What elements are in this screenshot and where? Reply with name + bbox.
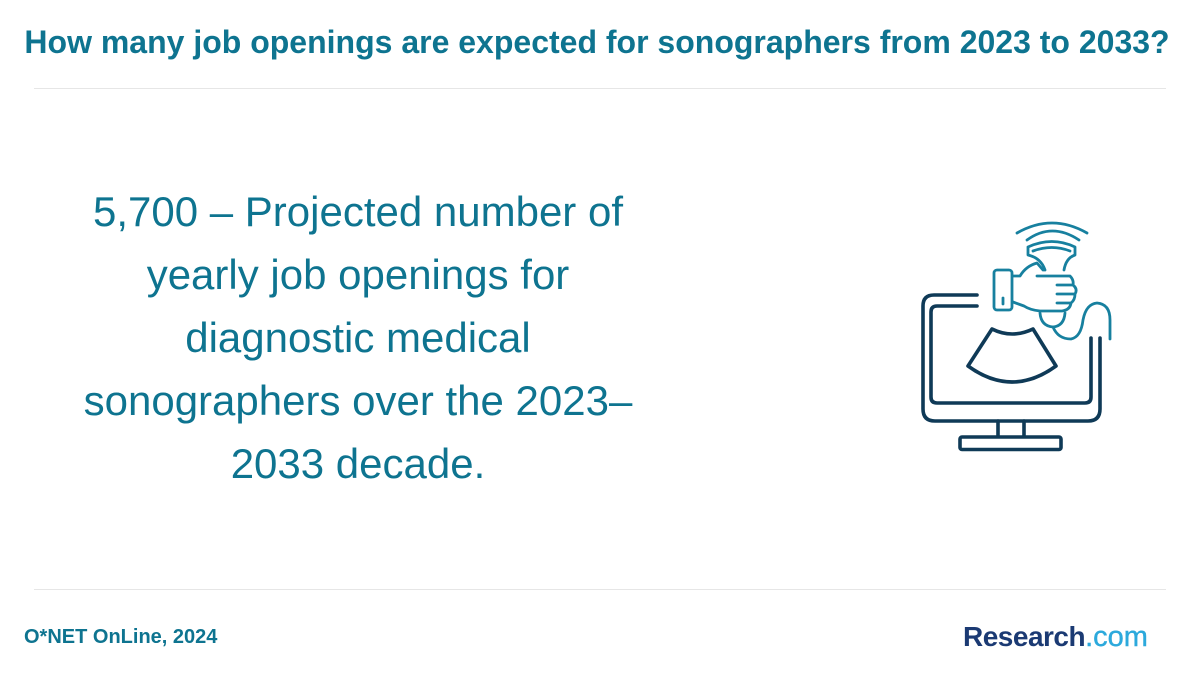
main statistic text: diagnostic medical — [185, 314, 531, 361]
icon part: monitor — [923, 295, 1100, 450]
main statistic text — [84, 188, 632, 487]
title: How many job openings are expected for sonographers from 2023 to 2033? — [24, 24, 1170, 60]
icon: ultrasound probe and monitor — [921, 222, 1112, 452]
logo: Research.com — [963, 621, 1148, 653]
source: O*NET OnLine, 2024 — [24, 626, 217, 648]
main statistic text: sonographers over the 2023– — [84, 377, 632, 424]
icon part: hand holding probe — [994, 223, 1110, 339]
main statistic text: yearly job openings for — [147, 251, 569, 298]
main statistic text: 5,700 – Projected number of — [93, 188, 623, 235]
main statistic text: 2033 decade. — [231, 440, 485, 487]
